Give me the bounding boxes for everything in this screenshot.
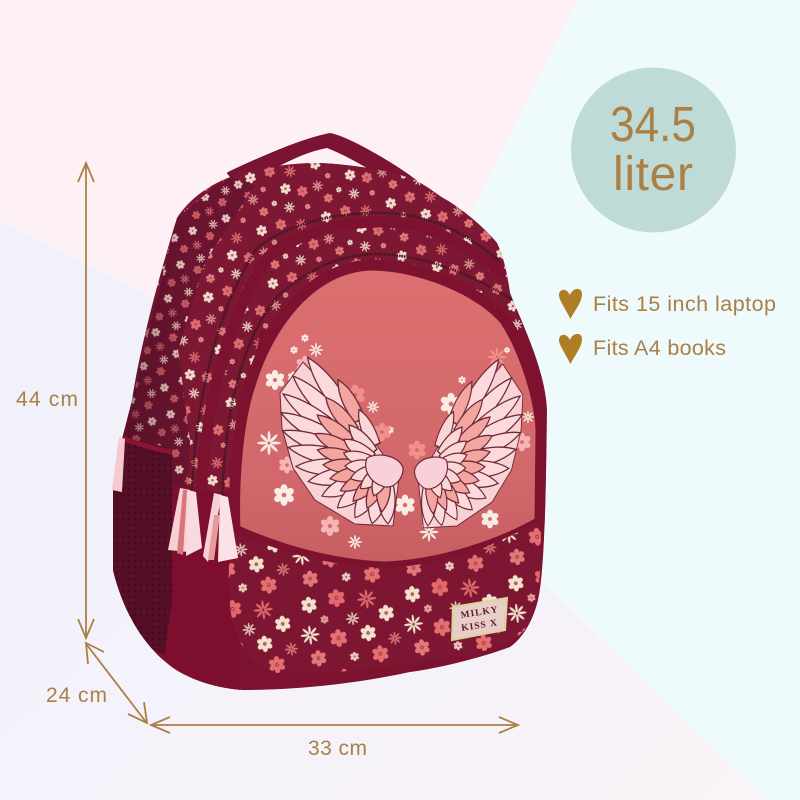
side shading [113,234,184,654]
feature: fits books: Fits A4 books [593,336,726,360]
brand label: MILKY [460,605,499,621]
mesh side pocket [108,442,172,654]
zipper tassel 2 [203,493,238,562]
backpack [100,134,560,695]
backpack body [100,150,560,695]
background: lavender area [0,222,765,800]
zipper tassel small [112,437,125,492]
brand label: KISS X [461,618,499,634]
wing flowers [257,334,534,549]
volume badge: 34.5 [610,98,696,152]
width dimension arrow [151,717,518,733]
depth dimension arrow [86,643,147,723]
background: pink triangle [0,0,578,420]
icon: heart [559,289,582,319]
brand label [452,598,507,640]
right wing [415,355,526,528]
front pink panel [235,265,541,567]
left wing joint [366,455,403,487]
handle [228,134,416,182]
lower floral panel [229,520,541,673]
height dimension arrow [78,163,94,638]
icon: heart [559,334,582,364]
upper floral fabric [122,163,526,488]
outer zipper [192,213,500,490]
inner zipper [222,254,512,500]
width label: 33 cm [308,737,367,760]
feature: fits laptop [559,289,776,319]
lower burgundy side [150,485,240,695]
height label: 44 cm [16,388,78,411]
side floral fabric [124,177,255,488]
zipper tassel 1 [168,488,202,556]
left wing [277,353,403,526]
volume badge [571,68,736,232]
volume badge: liter [613,148,693,201]
feature: fits laptop: Fits 15 inch laptop [593,292,776,316]
outer zipper strip [201,222,505,492]
depth label: 24 cm [46,684,107,707]
pocket rim [122,438,172,452]
feature: fits books [559,334,726,364]
